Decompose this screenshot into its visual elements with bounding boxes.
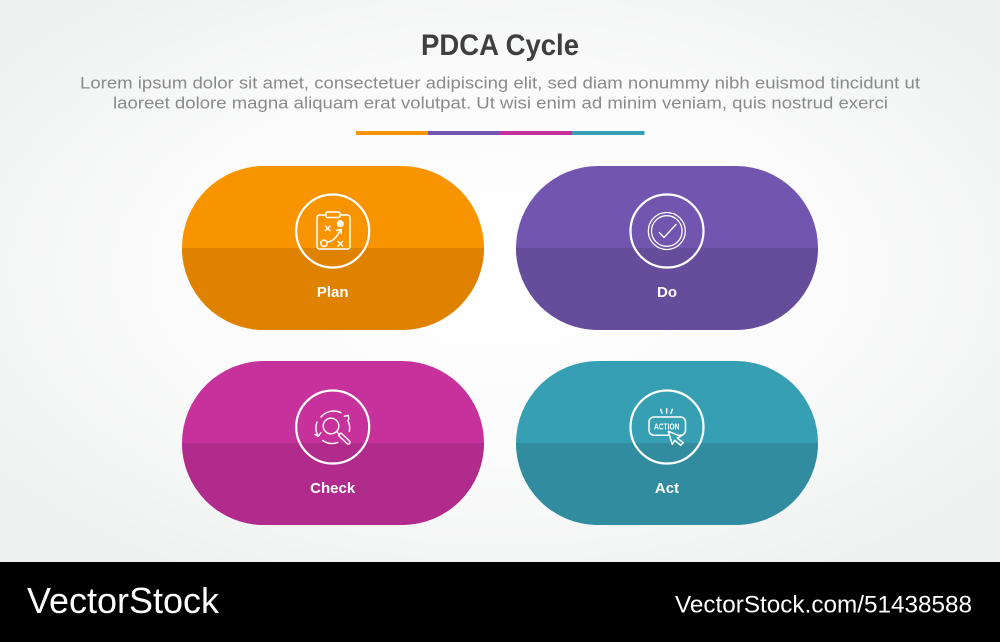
panel: Act [516,361,818,525]
panel: Plan [182,166,484,330]
label: Act: Act [655,480,679,497]
icon: action button with cursor [649,409,686,445]
subtitle text block: Lorem ipsum dolor sit amet, consectetuer adipiscing elit, sed diam nonummy nibh euismod tincidunt ut [80,74,920,92]
label: Check: Check [310,480,356,497]
icon: action button with cursor: ACTION [654,422,680,432]
title: PDCA Cycle [421,29,579,62]
footer logo text: VectorStock [27,580,220,621]
footer image URL text: VectorStock.com/51438588 [675,592,972,618]
subtitle text block: laoreet dolore magna aliquam erat volutpat. Ut wisi enim ad minim veniam, quis nostrud exerci [113,94,888,112]
panel: Do [516,166,818,330]
label: Plan: Plan [317,284,349,301]
icon: check mark badge [648,212,685,250]
icon: magnifier with cycle arrows [315,411,350,444]
panel: Check [182,361,484,525]
footer band [0,562,1000,642]
icon: clipboard plan [317,212,350,249]
subtitle text block [80,74,920,112]
label: Do: Do [657,284,677,301]
colour divider bar [356,131,644,135]
